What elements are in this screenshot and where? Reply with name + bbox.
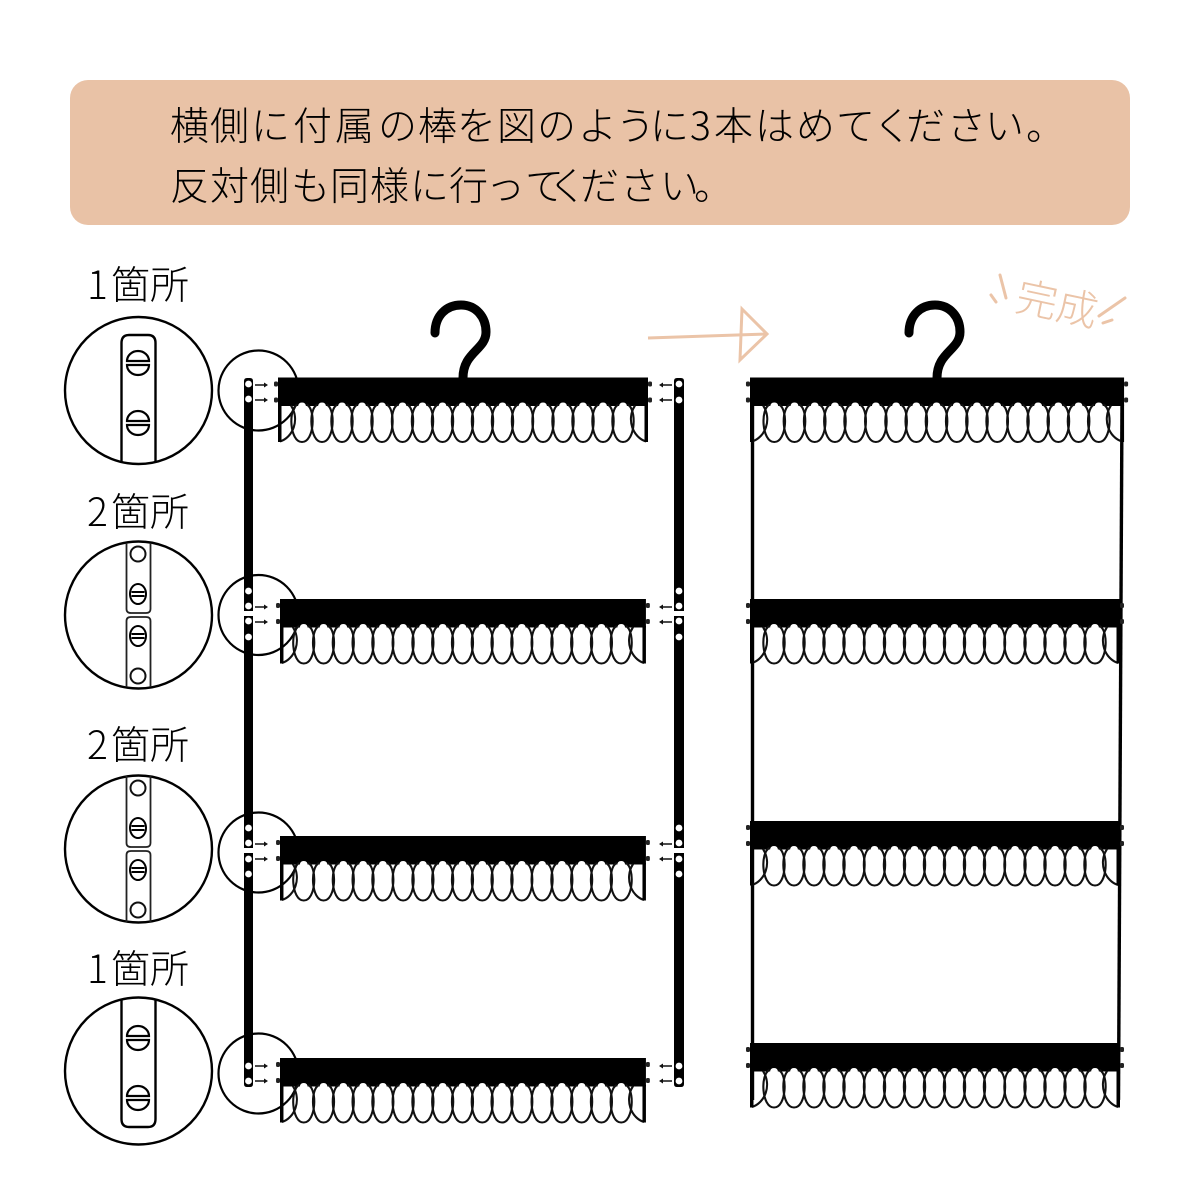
rack 3 bbox=[746, 821, 1124, 886]
callout label: 2 places (upper): 2箇所 bbox=[87, 482, 189, 538]
magnified detail: bottom joint bbox=[65, 998, 212, 1144]
disassembled hanger bbox=[244, 305, 684, 1122]
insertion arrows bbox=[255, 382, 672, 1084]
rack 1 bbox=[274, 378, 652, 442]
magnified detail: top joint bbox=[65, 317, 212, 464]
right rods bbox=[674, 378, 684, 1087]
completion label: 完成 bbox=[1012, 263, 1104, 339]
instruction line 2: 反対側も同様に行ってください。 bbox=[170, 156, 733, 212]
callout label: 2 places (lower): 2箇所 bbox=[87, 715, 189, 771]
instruction line 1: 横側に付属の棒を図のように3本はめてください。 bbox=[170, 96, 1065, 152]
magnified detail: second joint bbox=[65, 542, 212, 688]
rods bbox=[752, 400, 1122, 1100]
magnified detail: third joint bbox=[65, 776, 212, 922]
left rods bbox=[244, 378, 253, 1087]
hook bbox=[909, 305, 960, 378]
callout label: 1 place (top): 1箇所 bbox=[87, 255, 189, 311]
rack 2 bbox=[276, 599, 650, 664]
callout label: 1 place (bottom): 1箇所 bbox=[87, 939, 189, 995]
arrow to completed hanger bbox=[648, 309, 767, 360]
rod screw holes bbox=[245, 381, 682, 1084]
rack 2 bbox=[746, 599, 1124, 664]
completed hanger bbox=[746, 305, 1128, 1108]
zoom marker circles bbox=[218, 350, 298, 1114]
completion label bbox=[991, 263, 1125, 339]
sparkle ticks bbox=[991, 275, 1125, 323]
instruction banner bbox=[70, 80, 1130, 225]
rack 4 bbox=[276, 1058, 650, 1122]
rack 3 bbox=[276, 836, 650, 900]
rack 4 bbox=[746, 1043, 1124, 1108]
rack 1 bbox=[746, 378, 1128, 442]
hook bbox=[435, 305, 486, 378]
